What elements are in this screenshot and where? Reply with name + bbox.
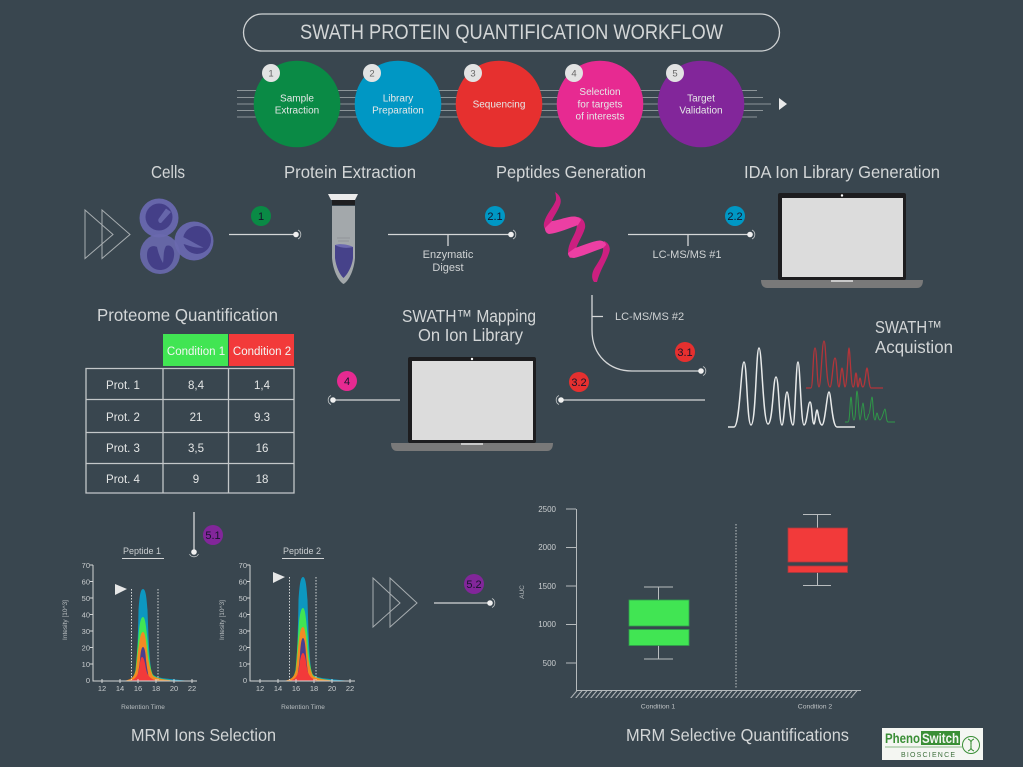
chart: peptide 2: 10 (239, 660, 247, 669)
logo: PhenoSwitch Bioscience: Pheno (885, 731, 920, 746)
chart: peptide 2: 16 (292, 684, 300, 693)
header: condition 1: Condition 1 (167, 346, 225, 358)
marker (273, 572, 285, 583)
connector 2.2 (628, 206, 755, 261)
table: protein quantification: 18 (256, 474, 268, 486)
chart: peptide 1: 10 (82, 660, 90, 669)
step 1: sample extraction (254, 61, 340, 147)
step 2: library preparation: 2 (369, 68, 375, 80)
heading: SWATH acquisition (875, 317, 953, 357)
step 2: library preparation (355, 61, 441, 147)
chart: peptide 2: 20 (239, 644, 247, 652)
icon: laptop mapping (391, 357, 553, 451)
icon: peptide helix (544, 192, 610, 282)
table: protein quantification: 21 (190, 412, 202, 424)
axis and ground (566, 509, 861, 698)
chart: peptide 2: 70 (239, 561, 247, 570)
heading: IDA ion library generation: IDA Ion Library Generation (744, 162, 940, 182)
spectrum: white (728, 348, 855, 427)
chart: peptide 1: 22 (188, 684, 196, 693)
box: condition 1 (629, 587, 689, 659)
table: protein quantification (86, 334, 294, 493)
table: protein quantification: Prot. 2 (106, 412, 140, 424)
chart: peptide 1: 14 (116, 684, 124, 693)
chart: peptide 2: 22 (346, 684, 354, 693)
table: protein quantification: 9.3 (254, 412, 270, 424)
step 1: sample extraction: Sample (280, 94, 314, 104)
heading: MRM selective quantifications: MRM Selective Quantifications (626, 725, 849, 745)
heading: protein extraction: Protein Extraction (284, 162, 416, 182)
chart: peptide 2: 18 (310, 684, 318, 693)
chart: peptide 1: 30 (82, 627, 90, 636)
heading: MRM ions selection: MRM Ions Selection (131, 725, 276, 745)
heading: cells: Cells (151, 162, 185, 182)
table: protein quantification: 1,4 (254, 380, 271, 392)
badge 3.1: 3.1 (677, 347, 693, 359)
step 4: selection for targets (557, 61, 643, 147)
header: condition 2 (229, 334, 294, 366)
header: condition 2: Condition 2 (233, 346, 291, 358)
badge 2.1: 2.1 (487, 211, 503, 223)
label: enzymatic digest: Digest (432, 262, 464, 274)
chart: peptide 1: 20 (170, 684, 178, 693)
chart: peptide 1: Intesity [10^3] (62, 600, 69, 640)
heading: SWATH mapping on ion library (402, 306, 536, 345)
step 4: selection for targets: Selection (579, 87, 621, 98)
connector 5.1 (190, 512, 223, 557)
chart: peptide 1: 20 (82, 644, 90, 652)
label: LC-MS/MS #2: LC-MS/MS #2 (615, 311, 684, 323)
badge 4: 4 (344, 376, 350, 388)
heading: SWATH acquisition: Acquistion (875, 337, 953, 357)
connector 2.1 (388, 206, 516, 274)
table: protein quantification: 9 (193, 474, 199, 486)
badge 3.2 (569, 372, 589, 392)
label: peptide 1: Peptide 1 (123, 546, 161, 556)
axes (247, 565, 355, 683)
table: protein quantification: Prot. 4 (106, 474, 141, 486)
spectrum: red (806, 341, 883, 388)
chart: peptide 1: 18 (152, 684, 160, 693)
chart: peptide 2: 60 (239, 578, 247, 586)
chart: peptide 2: 30 (239, 627, 247, 636)
peaks (282, 577, 350, 681)
badge 2.2: 2.2 (727, 211, 743, 223)
heading: SWATH mapping on ion library: On Ion Library (418, 325, 523, 345)
table: protein quantification: 16 (256, 443, 268, 455)
marker (115, 584, 127, 595)
chart: peptide 1: 70 (82, 561, 90, 570)
title: SWATH PROTEIN QUANTIFICATION WORKFLOW (300, 21, 723, 44)
step 4: selection for targets: 4 (571, 68, 577, 80)
icon: end arrow (779, 98, 787, 110)
badge 3.2: 3.2 (571, 377, 587, 389)
y axis labels: 2000 (538, 543, 557, 552)
step 2: library preparation: Preparation (372, 106, 424, 116)
table: protein quantification: Prot. 1 (106, 380, 140, 392)
chart: peptide 1: 40 (82, 610, 90, 620)
chart: peptide 2: 12 (256, 684, 264, 693)
logo: PhenoSwitch Bioscience: Switch (922, 731, 959, 746)
chart: AUC box plot (519, 505, 861, 710)
heading: SWATH acquisition: SWATH™ (875, 317, 942, 337)
connector 1 (229, 206, 301, 239)
step 1: sample extraction: 1 (268, 68, 274, 80)
connector 3.2 (556, 372, 705, 404)
y axis labels (538, 505, 557, 668)
peaks (122, 589, 190, 681)
icon: laptop library (761, 193, 923, 288)
label: LC-MS/MS #1: LC-MS/MS #1 (652, 249, 722, 261)
chart: peptide 1: 0 (86, 676, 90, 685)
y axis labels: 1000 (538, 620, 557, 629)
icon: double arrow (373, 578, 417, 627)
badge 5.1: 5.1 (205, 530, 221, 542)
chart: AUC box plot: Condition 1 (641, 704, 675, 710)
step 5: target validation (658, 61, 744, 147)
step 1: sample extraction: Extraction (275, 106, 319, 116)
label: peptide 2: Peptide 2 (283, 546, 321, 556)
logo: PhenoSwitch Bioscience: BIOSCIENCE (901, 752, 955, 759)
step 4: selection for targets: of interests (576, 112, 624, 122)
chart: peptide 2: 50 (239, 594, 247, 603)
table: protein quantification: 3,5 (188, 443, 204, 455)
chart: AUC box plot: Condition 2 (798, 704, 832, 710)
icon: cells (140, 198, 214, 274)
step 3: sequencing (456, 61, 542, 147)
icon: double arrow (85, 210, 130, 258)
step 3: sequencing: 3 (470, 68, 476, 80)
chart: AUC box plot: AUC (519, 585, 526, 599)
step 5: target validation: 5 (672, 68, 678, 80)
step 2: library preparation: Library (383, 94, 413, 104)
y axis labels: 500 (543, 659, 557, 668)
connector 5.2 (434, 574, 495, 608)
badge 1: 1 (258, 211, 264, 223)
icon: test tube (328, 194, 358, 284)
header: condition 1 (163, 334, 228, 366)
chart: peptide 2: 40 (239, 610, 247, 620)
table: protein quantification: Prot. 3 (106, 443, 140, 455)
chart: peptide 2 (219, 546, 355, 711)
chart: peptide 1: 16 (134, 684, 142, 693)
y axis labels: 2500 (538, 505, 557, 514)
chart: peptide 1: 12 (98, 684, 106, 693)
chart: peptide 2: 0 (243, 676, 247, 685)
connector 3.1 (592, 295, 706, 376)
chart: peptide 1: 60 (82, 578, 90, 586)
spectrum: green (845, 391, 895, 422)
step 4: selection for targets: for targets (577, 100, 623, 110)
table: protein quantification: 8,4 (188, 380, 205, 392)
y axis labels: 1500 (538, 582, 557, 591)
chart: peptide 2: Intesity [10^3] (219, 600, 226, 640)
workflow steps (237, 61, 787, 147)
chart: peptide 1: Retention Time (121, 704, 165, 711)
step 5: target validation: Target (687, 94, 715, 104)
step 3: sequencing: Sequencing (473, 100, 525, 110)
heading: SWATH mapping on ion library: SWATH™ Mapping (402, 306, 536, 326)
step 5: target validation: Validation (679, 106, 723, 116)
chart: peptide 2: 20 (328, 684, 336, 693)
chart: peptide 1 (62, 546, 197, 711)
logo: PhenoSwitch Bioscience (882, 728, 983, 760)
box: condition 2 (788, 514, 848, 586)
connector 4 (328, 371, 400, 404)
heading: proteome quantification: Proteome Quantification (97, 305, 278, 325)
title (244, 14, 780, 51)
chart: peptide 2: 14 (274, 684, 282, 693)
chart: peptide 2: Retention Time (281, 704, 325, 711)
heading: peptides generation: Peptides Generation (496, 162, 646, 182)
label: enzymatic digest: Enzymatic (423, 249, 474, 261)
chart: SWATH spectra (728, 341, 895, 427)
label: enzymatic digest (423, 249, 474, 274)
badge 5.2: 5.2 (466, 579, 482, 591)
chart: peptide 1: 50 (82, 594, 90, 603)
axes (90, 565, 197, 683)
